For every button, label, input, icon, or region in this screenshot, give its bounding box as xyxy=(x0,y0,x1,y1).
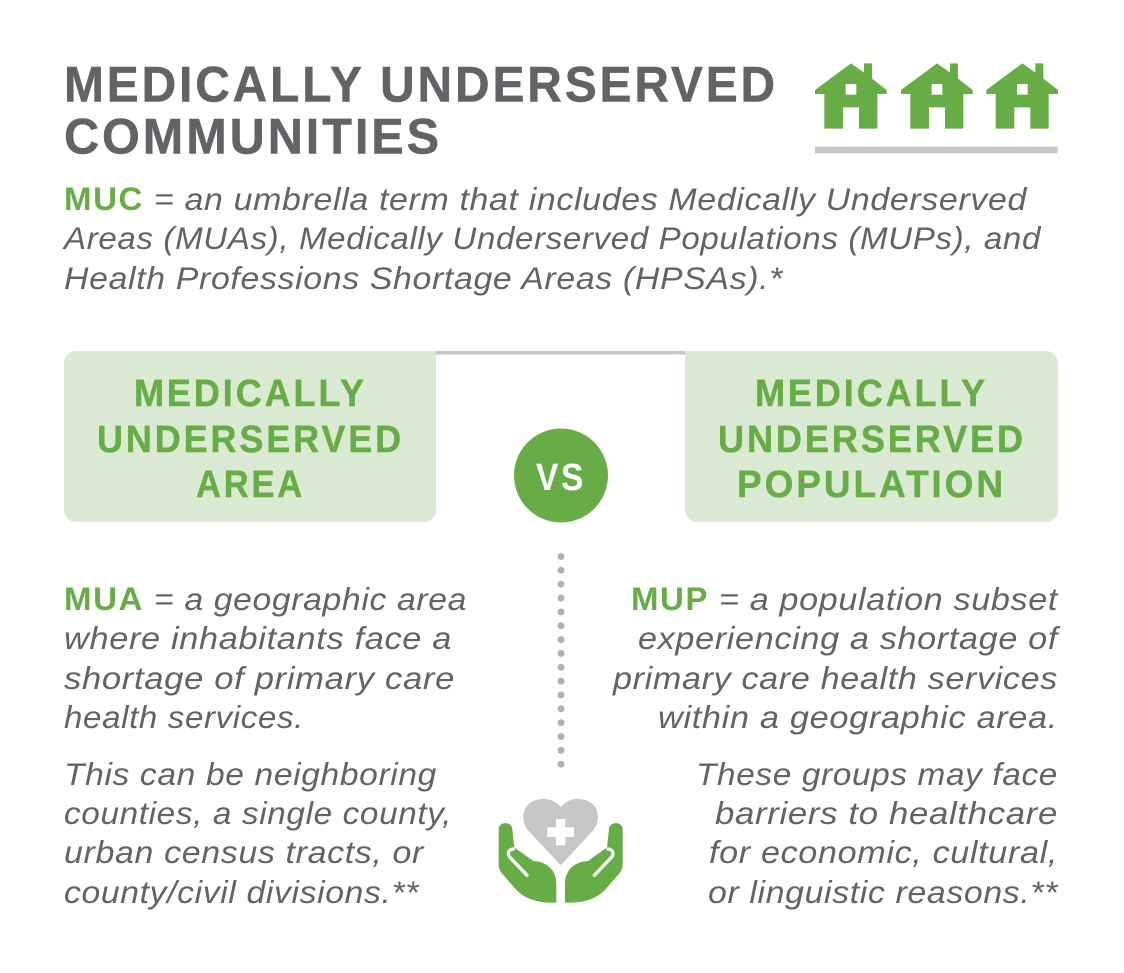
title: MEDICALLY UNDERSERVED xyxy=(64,56,778,112)
text block: MUP barriers: for economic, cultural, xyxy=(709,834,1058,870)
text block: MUA definition: shortage of primary care xyxy=(64,660,455,696)
panel: medically underserved area: AREA xyxy=(196,464,305,506)
text block: MUA definition: where inhabitants face a xyxy=(64,620,452,656)
icon: VS badge: VS xyxy=(536,457,586,499)
text block: MUA examples: urban census tracts, or xyxy=(64,834,425,870)
text block: MUP definition: = a population subset xyxy=(719,581,1059,617)
panel: medically underserved area: UNDERSERVED xyxy=(97,419,404,461)
panel: medically underserved population: MEDICALLY xyxy=(755,373,988,415)
text block: MUA definition: MUA xyxy=(64,581,144,617)
dotted divider xyxy=(558,553,564,768)
title: COMMUNITIES xyxy=(64,108,442,164)
title xyxy=(64,56,778,164)
text block: MUA examples: county/civil divisions.** xyxy=(64,874,420,910)
text block: MUC definition xyxy=(62,181,1042,296)
text block: MUA definition: health services. xyxy=(64,699,304,735)
text block: MUP barriers: These groups may face xyxy=(696,756,1058,792)
panel: medically underserved area: MEDICALLY xyxy=(134,373,367,415)
text block: MUP definition xyxy=(612,581,1061,735)
text block: MUA definition xyxy=(64,581,467,735)
text block: MUP definition: within a geographic area. xyxy=(658,699,1058,735)
icon: VS badge xyxy=(514,428,608,522)
text block: MUC definition: = an umbrella term that includes Medically Underserved xyxy=(154,181,1028,217)
text block: MUP barriers: or linguistic reasons.** xyxy=(708,874,1059,910)
text block: MUP definition: MUP xyxy=(631,581,709,617)
text block: MUA examples xyxy=(64,756,452,910)
panel: medically underserved population: POPULATION xyxy=(737,464,1006,506)
icon: hands holding heart with cross xyxy=(499,799,623,903)
panel: medically underserved population: UNDERSERVED xyxy=(718,419,1026,461)
text block: MUA definition: = a geographic area xyxy=(154,581,467,617)
connector line between panels xyxy=(436,351,685,354)
text block: MUC definition: Areas (MUAs), Medically Underserved Populations (MUPs), and xyxy=(62,220,1042,256)
text block: MUP barriers: barriers to healthcare xyxy=(715,795,1058,831)
text block: MUC definition: MUC xyxy=(64,181,144,217)
icon: row of houses xyxy=(815,63,1058,153)
text block: MUP barriers xyxy=(696,756,1059,910)
text block: MUA examples: counties, a single county, xyxy=(64,795,452,831)
text block: MUC definition: Health Professions Shortage Areas (HPSAs).* xyxy=(64,260,784,296)
text block: MUA examples: This can be neighboring xyxy=(64,756,437,792)
text block: MUP definition: primary care health services xyxy=(612,660,1058,696)
panel: medically underserved population xyxy=(685,351,1058,522)
text block: MUP definition: experiencing a shortage of xyxy=(638,620,1061,656)
panel: medically underserved area xyxy=(64,351,436,522)
